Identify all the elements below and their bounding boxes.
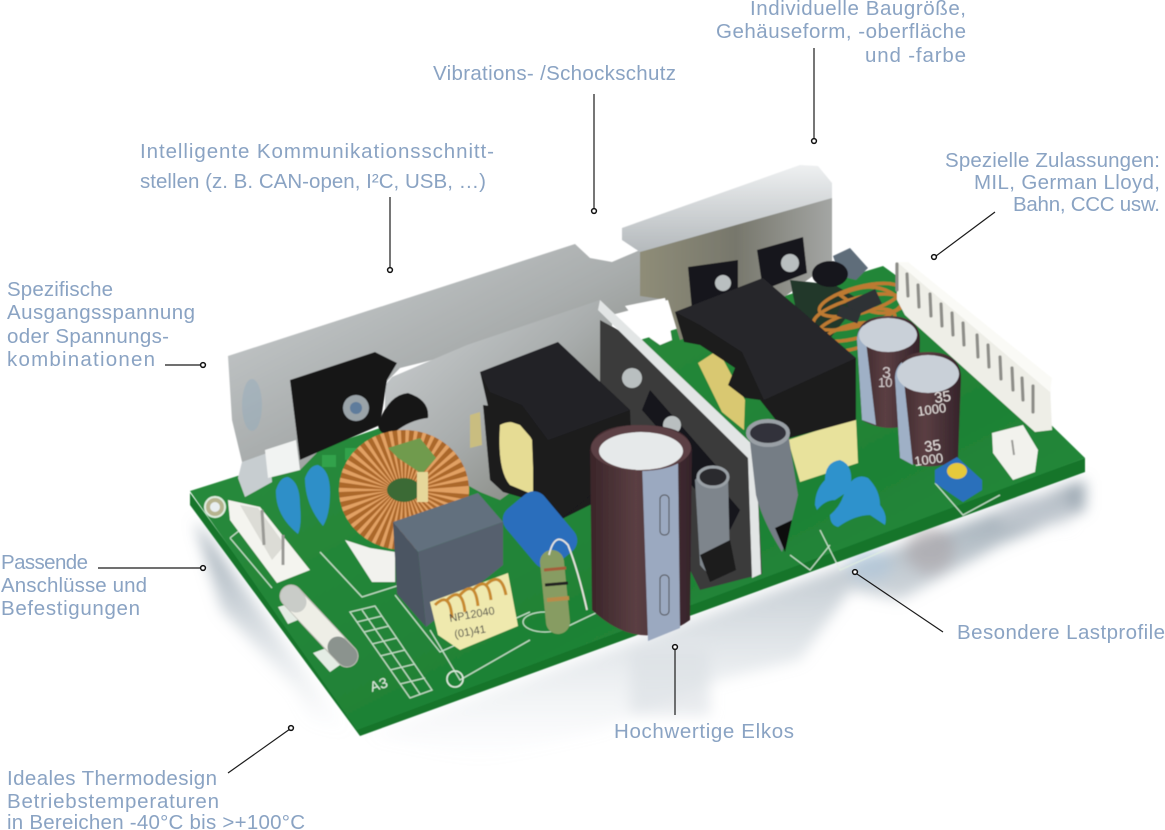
blue disc capacitors [276, 465, 330, 534]
grey capacitor small [695, 467, 736, 582]
callout: Ideales Thermodesign: Ideales Thermodesign [7, 767, 217, 790]
circuit board [190, 266, 1085, 736]
blue film capacitor [497, 486, 583, 574]
power supply board photo [190, 165, 1085, 736]
inner components behind plate [600, 320, 762, 590]
callout: Spezielle Zulassungen: Bahn, CCC usw. [1013, 193, 1160, 216]
dark area behind coil [790, 280, 860, 345]
callout: Besondere Lastprofile [853, 570, 1165, 644]
gap behind bracket [625, 298, 672, 345]
callout: Spezifische Ausgangsspannung: kombinationen [7, 348, 155, 371]
callout: Spezifische Ausgangsspannung: oder Spannungs- [7, 325, 169, 348]
callout: Spezielle Zulassungen: Spezielle Zulassungen: [945, 149, 1160, 172]
resistor [544, 539, 587, 622]
capacitor front: 1000 [916, 400, 947, 419]
black blob rear [812, 261, 848, 287]
transformer centre [470, 342, 632, 520]
capacitor rear: 10 [878, 375, 892, 390]
callout: Ideales Thermodesign: Betriebstemperaturen [7, 790, 219, 813]
transformer right [675, 278, 858, 482]
capacitor front: 35 [933, 388, 952, 407]
callout: Intelligente Kommunikationsschnittstellen: stellen (z. B. CAN-open, I²C, USB, …) [140, 170, 486, 193]
inner plate [385, 300, 612, 500]
callout: Passende Anschlüsse: Anschlüsse und [1, 574, 147, 597]
grey box rear [833, 248, 868, 280]
callout: Hochwertige Elkos [614, 645, 794, 743]
capacitor front [895, 352, 961, 469]
white connector left [228, 500, 310, 583]
callout: Individuelle Baugröße [716, 0, 966, 143]
callout: Vibrations- /Schockschutz [433, 62, 676, 213]
callout: Spezielle Zulassungen: MIL, German Lloyd, [974, 171, 1160, 194]
metal bracket right [622, 165, 832, 340]
blue trimmer [935, 457, 982, 502]
callout: Individuelle Baugröße: Gehäuseform, -oberfläche [716, 20, 966, 43]
capacitor rear [857, 316, 920, 428]
copper coil rear [810, 277, 906, 357]
capacitor rear: 3 [882, 365, 891, 382]
yellow coil: NP12040 [448, 605, 496, 625]
callout: Ideales Thermodesign [7, 726, 305, 830]
toroid inductor [345, 438, 445, 582]
callout: Vibrations- /Schockschutz: Vibrations- /Schockschutz [433, 62, 676, 85]
metal bracket left [228, 244, 668, 470]
connector strip right [897, 262, 1052, 432]
callout: Spezifische Ausgangsspannung [7, 278, 205, 371]
large capacitor [590, 425, 692, 641]
reflection under board [195, 480, 1085, 760]
callout: Passende Anschlüsse: Passende [1, 551, 88, 574]
right back transistors [688, 237, 807, 310]
small white connector [992, 425, 1038, 480]
black transistor left [290, 352, 397, 467]
circuit board: A3 [368, 675, 391, 697]
callout: Passende Anschlüsse [1, 551, 205, 620]
callout: Spezifische Ausgangsspannung: Ausgangsspannung [7, 301, 195, 324]
callout: Intelligente Kommunikationsschnittstellen: Intelligente Kommunikationsschnitt- [140, 140, 494, 163]
callout: Spezielle Zulassungen [932, 149, 1160, 259]
yellow coil [430, 573, 518, 650]
callout: Individuelle Baugröße: und -farbe [865, 44, 966, 67]
blue disc capacitors right [815, 460, 886, 527]
fuse [291, 596, 347, 656]
grey capacitor tall [748, 421, 798, 552]
capacitor front: 1000 [913, 450, 944, 469]
capacitor front: 35 [923, 437, 942, 456]
grey box capacitor [393, 493, 503, 627]
callout: Passende Anschlüsse: Befestigungen [1, 597, 140, 620]
silkscreen table [350, 606, 432, 698]
yellow coil: (01)41 [453, 624, 487, 641]
plate bright edge [598, 300, 761, 578]
callout: Hochwertige Elkos: Hochwertige Elkos [614, 720, 794, 743]
callout: Intelligente Kommunikationsschnittstellen [140, 140, 494, 272]
callout: Spezifische Ausgangsspannung: Spezifische [7, 278, 113, 301]
callout: Besondere Lastprofile: Besondere Lastprofile [957, 621, 1165, 644]
black blob left [378, 393, 428, 434]
